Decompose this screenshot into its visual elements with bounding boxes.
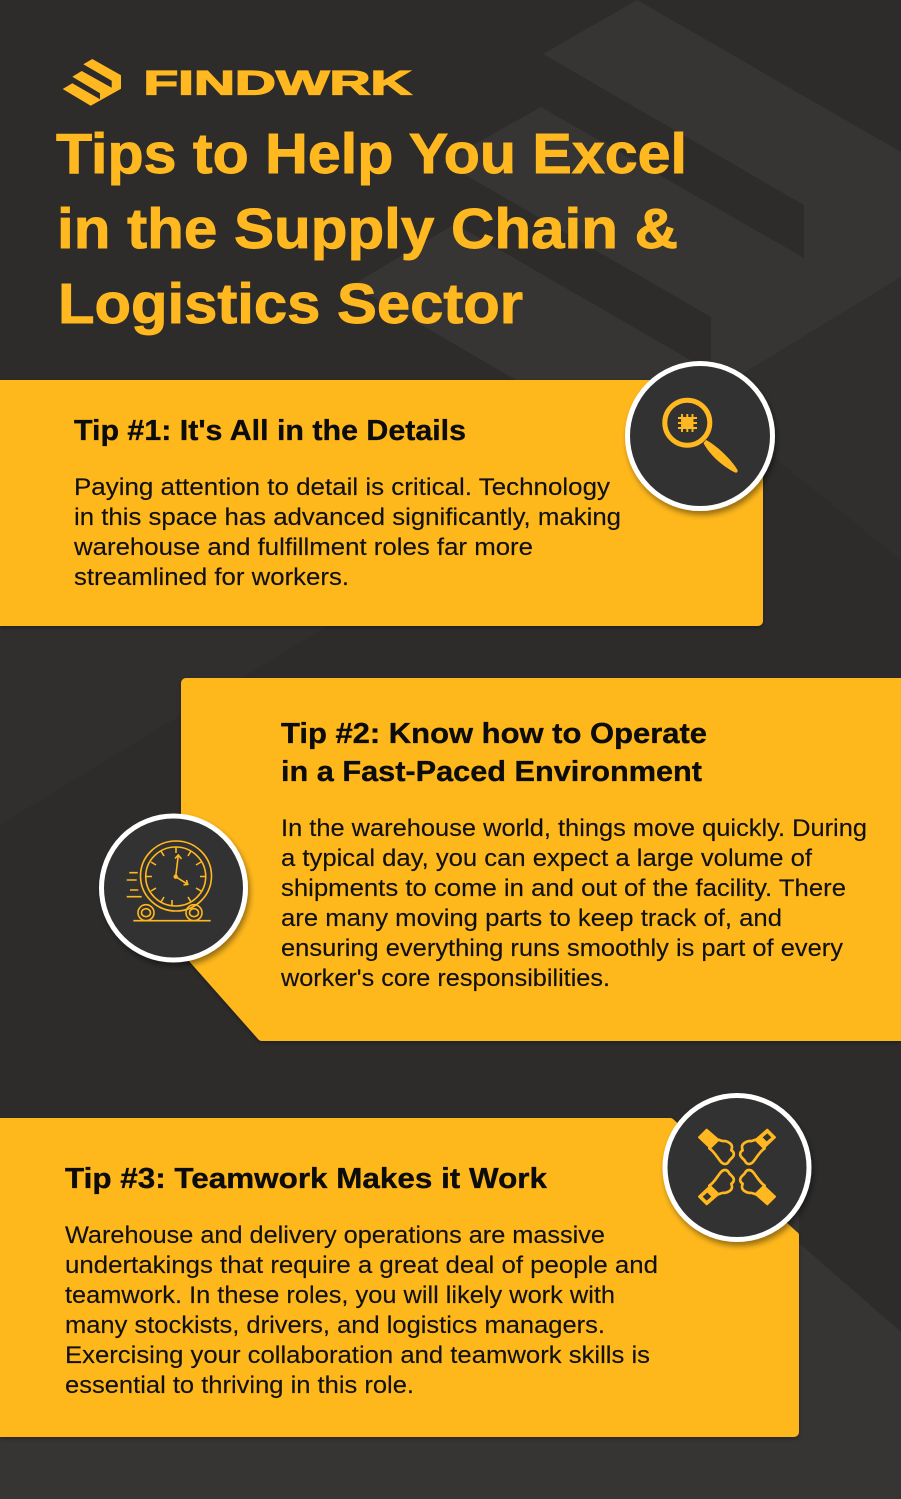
logo	[63, 59, 412, 106]
tip 1 body: streamlined for workers.	[74, 564, 349, 591]
tip 2 body: worker's core responsibilities.	[280, 965, 610, 992]
icon: four fists	[665, 1096, 809, 1240]
title: Logistics Sector	[58, 272, 523, 336]
panel: tip 1	[0, 364, 772, 626]
tip 3 body: many stockists, drivers, and logistics managers.	[65, 1312, 605, 1339]
tip 2 body	[280, 815, 867, 992]
title: in the Supply Chain &	[57, 197, 678, 261]
tip 2 body: ensuring everything runs smoothly is part of every	[281, 935, 843, 962]
icon: magnifying glass over chip	[628, 364, 772, 508]
tip 1 heading: Tip #1: It's All in the Details	[74, 415, 466, 447]
tip 2 body: shipments to come in and out of the facility. There	[281, 875, 846, 902]
panel: tip 2	[102, 678, 901, 1041]
tip 1 body: in this space has advanced significantly, making	[74, 504, 621, 531]
tip 2 heading: in a Fast-Paced Environment	[281, 756, 703, 788]
title: Tips to Help You Excel	[56, 122, 687, 186]
panel: tip 3	[0, 1096, 809, 1437]
tip 2 body: a typical day, you can expect a large volume of	[281, 845, 812, 872]
tip 1 body: warehouse and fulfillment roles far more	[73, 534, 533, 561]
bottom-right fist	[740, 1170, 775, 1204]
icon: fast clock	[102, 816, 246, 960]
tip 1 body: Paying attention to detail is critical. Technology	[74, 474, 610, 501]
tip 3 body: Warehouse and delivery operations are massive	[65, 1222, 605, 1249]
title	[56, 122, 687, 336]
top-left fist	[699, 1130, 734, 1164]
tip 3 body: teamwork. In these roles, you will likely work with	[65, 1282, 615, 1309]
tip 1 body	[73, 474, 621, 591]
tip 3 body: Exercising your collaboration and teamwork skills is	[65, 1342, 650, 1369]
logo mark	[63, 59, 121, 106]
card 2	[181, 678, 901, 1041]
card 3	[0, 1118, 799, 1437]
tip 3 body: essential to thriving in this role.	[65, 1372, 414, 1399]
tip 3 body	[65, 1222, 658, 1399]
tip 2 heading	[281, 718, 707, 788]
card 1	[0, 380, 763, 626]
tip 3 body: undertakings that require a great deal of people and	[65, 1252, 658, 1279]
tip 2 heading: Tip #2: Know how to Operate	[281, 718, 707, 750]
top-right fist	[740, 1130, 775, 1164]
tip 2 body: are many moving parts to keep track of, and	[281, 905, 782, 932]
bottom-left fist	[699, 1170, 734, 1204]
logo wordmark: FINDWRK	[144, 64, 412, 102]
tip 2 body: In the warehouse world, things move quickly. During	[281, 815, 867, 842]
tip 3 heading: Tip #3: Teamwork Makes it Work	[65, 1163, 547, 1195]
